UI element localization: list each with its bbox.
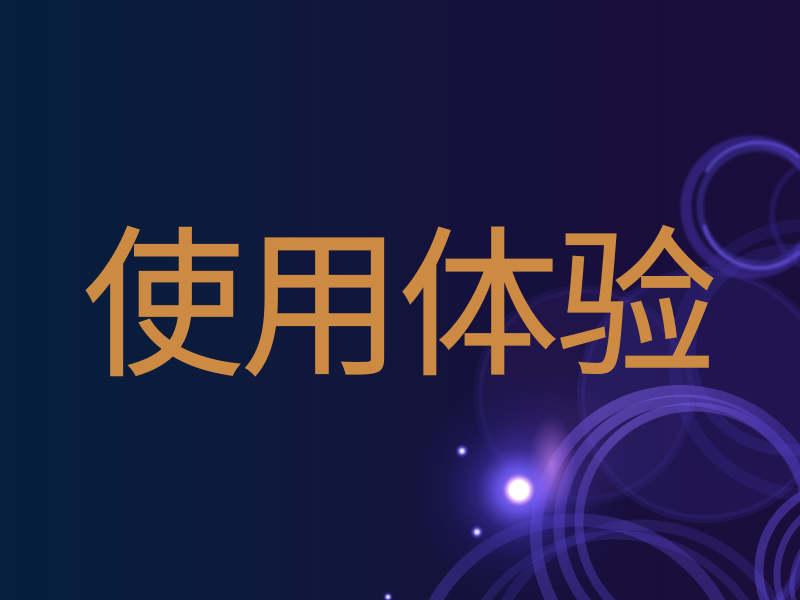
top right ring cluster	[686, 141, 800, 273]
sparkle middle	[470, 525, 484, 539]
far right ring cluster	[759, 484, 800, 600]
light core	[502, 473, 536, 507]
central glow	[407, 378, 631, 600]
lower right bright ring cluster	[536, 391, 800, 600]
light flare warm accent	[528, 415, 576, 515]
bottom arc rings	[413, 520, 795, 600]
large translucent discs	[478, 225, 800, 525]
sparkle top	[455, 444, 469, 458]
title: 使用体验	[83, 217, 717, 397]
sparkle bottom	[383, 592, 393, 600]
